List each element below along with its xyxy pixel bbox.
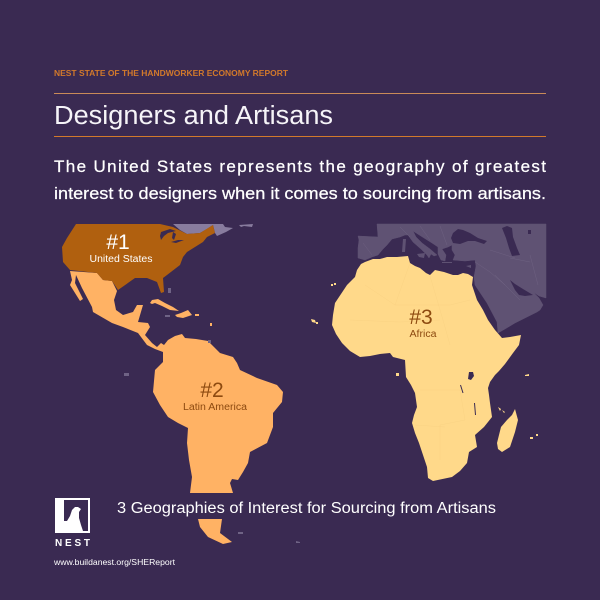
sea: Persian Gulf xyxy=(510,280,533,296)
Great Lakes xyxy=(160,229,184,243)
map: United States xyxy=(62,224,215,293)
African islands xyxy=(311,283,538,439)
African borders xyxy=(350,263,470,460)
map: small gray islands xyxy=(124,288,300,543)
title: Designers and Artisans xyxy=(54,102,333,130)
map: Canada fragment xyxy=(173,224,253,236)
borders xyxy=(363,226,538,300)
map: Africa xyxy=(311,256,538,481)
label: #1 United States: United States xyxy=(90,254,153,265)
map: Europe and Middle East xyxy=(358,224,546,333)
label: #2 Latin America: #2 xyxy=(200,379,224,402)
map: Latin America xyxy=(70,271,283,544)
sea: Caspian xyxy=(502,226,531,256)
header rule top xyxy=(54,93,546,94)
header rule bottom xyxy=(54,136,546,137)
label: #3 Africa: #3 xyxy=(409,306,433,329)
African lakes xyxy=(468,372,474,380)
intro text xyxy=(54,157,546,203)
Madagascar xyxy=(497,409,518,452)
label: #3 Africa xyxy=(409,306,437,340)
eyebrow: report name: NEST STATE OF THE HANDWORKER ECONOMY REPORT xyxy=(54,68,289,78)
url: www.buildanest.org/SHEReport xyxy=(53,557,176,567)
label: #2 Latin America xyxy=(183,379,248,413)
label: #1 United States: #1 xyxy=(106,231,130,254)
logo: NEST xyxy=(55,498,90,549)
islands: Sardinia and Sicily xyxy=(402,239,471,268)
label: #2 Latin America: Latin America xyxy=(183,402,248,413)
sea: Black Sea xyxy=(451,229,487,244)
intro text: interest to designers when it comes to sourcing from artisans. xyxy=(54,184,546,203)
intro text: The United States represents the geography of greatest xyxy=(54,157,546,176)
map caption: 3 Geographies of Interest for Sourcing from Artisans xyxy=(117,500,496,517)
logo: NEST: NEST xyxy=(55,538,90,549)
map xyxy=(62,224,546,544)
label: #3 Africa: Africa xyxy=(410,329,437,340)
label: #1 United States xyxy=(90,231,153,265)
